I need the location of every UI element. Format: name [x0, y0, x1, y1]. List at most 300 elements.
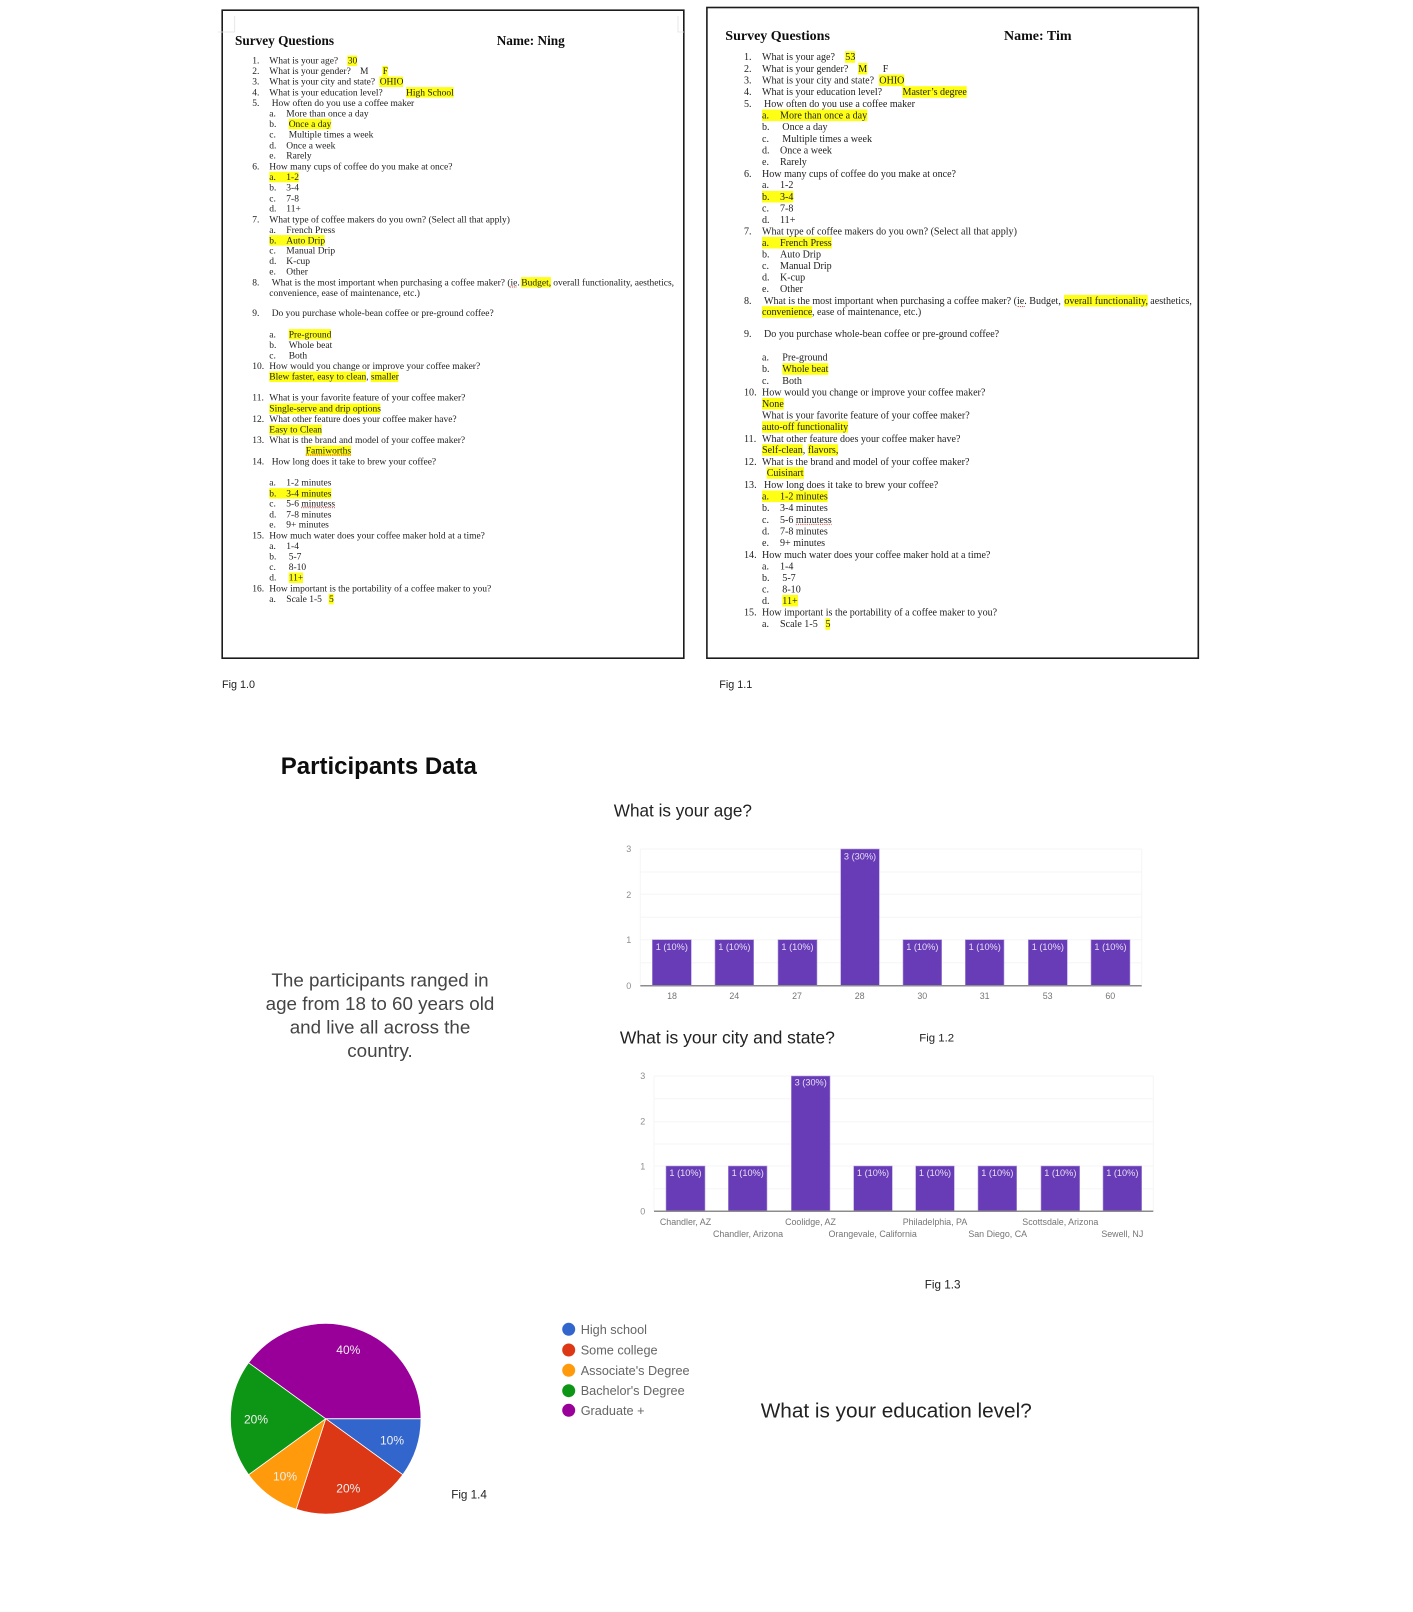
- survey questions and answers: b.: [762, 573, 770, 584]
- survey questions and answers: a.: [762, 238, 769, 249]
- survey questions and answers: 9.: [252, 309, 259, 319]
- survey questions and answers: How long does it take to brew your coffee?: [764, 480, 939, 491]
- survey questions and answers: 5-7: [782, 573, 796, 584]
- bars: [666, 1076, 1142, 1211]
- survey questions and answers: e.: [269, 268, 276, 278]
- survey questions and answers: 3-4 minutes: [286, 489, 332, 499]
- chart heading: city and state: What is your city and state?: [620, 1027, 835, 1047]
- survey questions and answers: What is your gender?: [762, 64, 849, 75]
- survey questions and answers: Multiple times a week: [782, 134, 873, 145]
- x axis labels: Chandler, AZ: [660, 1217, 712, 1227]
- survey questions and answers: Do you purchase whole-bean coffee or pre-ground coffee?: [272, 308, 494, 319]
- survey questions and answers: auto-off functionality: [762, 422, 848, 433]
- survey questions and answers: Both: [782, 376, 802, 387]
- slice: associate's degree: [249, 1419, 326, 1509]
- survey questions and answers: 13.: [744, 480, 757, 491]
- survey questions and answers: 7-8: [286, 194, 299, 204]
- caption: Fig 1.0: Fig 1.0: [222, 679, 255, 691]
- survey questions and answers: overall functionality, aesthetics,: [553, 277, 674, 288]
- respondent name: Name: Ning: [497, 33, 565, 48]
- survey questions and answers: c.: [762, 584, 769, 596]
- survey questions and answers: 2.: [252, 67, 259, 77]
- survey questions and answers: 9.: [744, 329, 752, 340]
- survey questions and answers: b.: [762, 122, 770, 133]
- chart heading: age: What is your age?: [614, 801, 752, 821]
- slice percentage labels: 10%: [380, 1433, 404, 1447]
- spell-check underlines: [796, 306, 1025, 524]
- survey questions and answers: c.: [762, 204, 769, 214]
- slice: bachelor's degree: [230, 1363, 326, 1475]
- survey questions and answers: 4.: [252, 88, 259, 98]
- survey questions and answers: Rarely: [286, 152, 312, 162]
- survey questions and answers: How long does it take to brew your coffee?: [272, 456, 436, 467]
- survey questions and answers: Rarely: [780, 157, 807, 168]
- x axis labels: 31: [980, 991, 990, 1001]
- x axis labels: 60: [1105, 991, 1115, 1001]
- survey questions and answers: d.: [762, 215, 770, 226]
- x axis labels: [667, 991, 1115, 1001]
- survey questions and answers: c.: [269, 247, 276, 257]
- x axis labels: Scottsdale, Arizona: [1022, 1217, 1098, 1227]
- survey questions and answers: French Press: [286, 226, 335, 236]
- survey title: Survey Questions: [235, 33, 334, 48]
- survey questions and answers: 4.: [744, 87, 752, 98]
- survey questions and answers: 10.: [252, 362, 264, 372]
- survey questions and answers: What is the brand and model of your coffee maker?: [762, 457, 970, 468]
- survey questions and answers: Blew faster, easy to clean,: [269, 372, 369, 383]
- slice percentage labels: [244, 1343, 404, 1495]
- bar value labels: 1 (10%): [969, 942, 1001, 952]
- survey questions and answers: F: [383, 67, 388, 77]
- survey questions and answers: Both: [289, 351, 307, 361]
- survey questions and answers: 5-6 minutess: [286, 500, 335, 510]
- survey questions and answers: a.: [269, 330, 276, 340]
- x axis labels: 27: [792, 991, 802, 1001]
- survey questions and answers: 5.: [744, 99, 752, 110]
- survey questions and answers: convenience, ease of maintenance, etc.): [269, 288, 420, 299]
- survey questions and answers: More than once a day: [286, 110, 369, 120]
- survey questions and answers: Auto Drip: [780, 250, 821, 260]
- y axis labels: 0: [640, 1207, 645, 1217]
- survey questions and answers: d.: [269, 510, 276, 520]
- bar value labels: 3 (30%): [844, 851, 876, 861]
- survey questions and answers: Easy to Clean: [269, 426, 322, 436]
- survey questions and answers: d.: [269, 257, 276, 267]
- survey questions and answers: Cuisinart: [767, 468, 804, 479]
- survey questions and answers: c.: [269, 131, 276, 141]
- survey questions and answers: What other feature does your coffee maker have?: [269, 414, 457, 425]
- survey questions and answers: c.: [762, 261, 769, 272]
- bar value labels: 1 (10%): [669, 1168, 702, 1178]
- bars: [652, 849, 1130, 986]
- survey questions and answers: Pre-ground: [289, 330, 332, 340]
- legend item: bachelor's degree: Bachelor's Degree: [581, 1384, 685, 1398]
- axis baseline: [640, 985, 1142, 987]
- survey questions and answers: 11+: [780, 215, 796, 226]
- slice: some college: [296, 1419, 403, 1514]
- survey questions and answers: e.: [269, 152, 276, 162]
- survey questions and answers: Scale 1-5: [780, 619, 818, 630]
- bar value labels: 1 (10%): [1044, 1168, 1076, 1178]
- y axis labels: 3: [640, 1071, 645, 1081]
- survey questions and answers: 11+: [286, 205, 301, 215]
- chart heading: education level: What is your education level?: [761, 1399, 1032, 1422]
- bar value labels: 1 (10%): [1094, 942, 1127, 952]
- panel: survey form Tim: [707, 8, 1198, 658]
- survey questions and answers: 1-2 minutes: [286, 478, 332, 488]
- survey questions and answers: K-cup: [780, 272, 805, 284]
- survey questions and answers: How would you change or improve your coffee maker?: [269, 361, 480, 372]
- bar chart: age: [626, 844, 1142, 1001]
- x axis labels: Philadelphia, PA: [903, 1217, 967, 1227]
- legend item: high school: High school: [581, 1323, 647, 1337]
- survey questions and answers: 1-2: [286, 173, 299, 183]
- survey questions and answers: What is the most important when purchasing a coffee maker? (ie. Budget,: [764, 296, 1061, 307]
- text block: participants summary: and live all across the: [290, 1016, 470, 1037]
- survey questions and answers: , ease of maintenance, etc.): [812, 307, 921, 318]
- survey questions and answers: Self-clean,: [762, 445, 805, 456]
- gridlines: [640, 849, 1142, 985]
- survey questions and answers: 7.: [744, 226, 752, 238]
- caption: Fig 1.3: Fig 1.3: [925, 1278, 961, 1291]
- survey questions and answers: c.: [269, 500, 276, 510]
- slice percentage labels: 20%: [244, 1412, 268, 1426]
- axis baseline: [654, 1210, 1153, 1212]
- survey questions and answers: 13.: [252, 436, 264, 446]
- survey questions and answers: 8-10: [782, 584, 801, 596]
- survey questions and answers: c.: [762, 376, 769, 387]
- slice percentage labels: 20%: [336, 1481, 361, 1495]
- survey questions and answers: 30: [348, 57, 357, 67]
- survey questions and answers: e.: [762, 284, 769, 295]
- text block: participants summary: The participants ranged in: [271, 970, 489, 991]
- survey questions and answers: Do you purchase whole-bean coffee or pre-ground coffee?: [764, 329, 1000, 340]
- survey questions and answers: K-cup: [286, 257, 310, 267]
- survey questions and answers: M: [360, 67, 369, 77]
- caption: Fig 1.1: Fig 1.1: [719, 679, 752, 691]
- survey questions and answers: French Press: [780, 238, 832, 249]
- survey questions and answers: How much water does your coffee maker hold at a time?: [762, 550, 991, 561]
- survey questions and answers: 5-7: [289, 552, 302, 562]
- survey questions and answers: 11.: [744, 434, 756, 445]
- x axis labels: Chandler, Arizona: [713, 1229, 783, 1239]
- survey questions and answers: 2.: [744, 64, 752, 75]
- survey questions and answers: 7-8 minutes: [780, 526, 828, 538]
- x axis labels: 24: [729, 991, 739, 1001]
- panel: survey form Ning: [218, 10, 684, 658]
- survey questions and answers: 1-2: [780, 180, 793, 191]
- caption: Fig 1.4: Fig 1.4: [451, 1488, 487, 1501]
- survey questions and answers: Famiworths: [306, 447, 351, 457]
- survey questions and answers: convenience: [762, 307, 813, 318]
- gridlines: [654, 1076, 1153, 1211]
- survey questions and answers: b.: [269, 489, 276, 499]
- survey questions and answers: d.: [269, 205, 276, 215]
- survey questions and answers: What is your city and state?: [269, 78, 375, 88]
- y axis labels: [626, 844, 631, 991]
- survey questions and answers: d.: [269, 574, 276, 584]
- survey questions and answers: F: [883, 64, 889, 75]
- survey questions and answers: d.: [762, 146, 770, 156]
- survey questions and answers: b.: [269, 552, 276, 562]
- survey questions and answers: 16.: [252, 584, 264, 594]
- survey questions and answers: aesthetics,: [1150, 296, 1192, 307]
- survey questions and answers: 5: [329, 595, 334, 605]
- heading: Participants Data: Participants Data: [281, 753, 478, 780]
- survey questions and answers: Once a week: [780, 146, 833, 156]
- bar value labels: 1 (10%): [1032, 942, 1064, 952]
- survey questions and answers: 11+: [782, 596, 798, 607]
- survey questions and answers: 7-8 minutes: [286, 510, 332, 520]
- page corner marks: [218, 16, 684, 32]
- survey questions and answers: How many cups of coffee do you make at once?: [269, 162, 452, 173]
- survey questions and answers: 8-10: [289, 563, 306, 573]
- survey questions and answers: 12.: [744, 457, 757, 468]
- survey questions and answers: 53: [845, 52, 855, 63]
- survey questions and answers: a.: [762, 110, 769, 122]
- survey questions and answers: 3-4: [286, 184, 299, 194]
- survey questions and answers: Budget,: [521, 278, 551, 288]
- survey questions and answers: What is your favorite feature of your coffee maker?: [269, 393, 465, 404]
- y axis labels: 1: [640, 1162, 645, 1172]
- x axis labels: Coolidge, AZ: [785, 1217, 836, 1227]
- survey questions and answers: Pre-ground: [782, 352, 828, 364]
- x axis labels: 30: [917, 991, 927, 1001]
- y axis labels: 0: [626, 981, 631, 991]
- survey questions and answers: a.: [269, 542, 276, 552]
- x axis labels: 28: [855, 991, 865, 1001]
- survey questions and answers: OHIO: [380, 78, 404, 88]
- panel frame: [222, 10, 684, 658]
- bar value labels: 1 (10%): [718, 942, 750, 952]
- survey questions and answers: OHIO: [879, 76, 904, 86]
- survey questions and answers: What is your favorite feature of your coffee maker?: [762, 410, 970, 422]
- survey questions and answers: 14.: [744, 550, 757, 561]
- survey questions and answers: How important is the portability of a coffee maker to you?: [269, 583, 491, 594]
- survey questions and answers: d.: [269, 141, 276, 151]
- survey questions and answers: Once a day: [289, 120, 332, 130]
- survey questions and answers: How important is the portability of a coffee maker to you?: [762, 608, 998, 618]
- survey questions and answers: a.: [762, 619, 769, 630]
- y axis labels: 3: [626, 844, 631, 854]
- x axis labels: 53: [1043, 991, 1053, 1001]
- answer highlights: [762, 51, 1148, 630]
- survey questions and answers: 3.: [252, 78, 259, 88]
- survey questions and answers: 15.: [744, 608, 757, 618]
- survey questions and answers: [744, 52, 1192, 630]
- pie chart: education level: [230, 1323, 421, 1514]
- survey questions and answers: 9+ minutes: [780, 538, 825, 549]
- survey questions and answers: What is your age?: [269, 57, 338, 67]
- survey questions and answers: e.: [762, 157, 769, 168]
- y axis labels: 1: [626, 935, 631, 945]
- survey questions and answers: b.: [269, 120, 276, 130]
- legend item: graduate +: Graduate +: [581, 1404, 645, 1418]
- answer highlights: [269, 56, 551, 604]
- survey questions and answers: What is your city and state?: [762, 76, 875, 86]
- survey questions and answers: 10.: [744, 388, 757, 398]
- survey questions and answers: Other: [780, 284, 804, 295]
- bar chart: city and state: [640, 1071, 1153, 1239]
- survey questions and answers: c.: [269, 563, 276, 573]
- survey questions and answers: 1.: [252, 57, 259, 67]
- survey questions and answers: What type of coffee makers do you own? (Select all that apply): [762, 226, 1017, 238]
- survey questions and answers: a.: [269, 478, 276, 488]
- survey questions and answers: 6.: [252, 163, 259, 173]
- survey questions and answers: Once a week: [286, 141, 336, 151]
- survey questions and answers: How much water does your coffee maker hold at a time?: [269, 530, 485, 541]
- survey questions and answers: 3.: [744, 76, 752, 86]
- slice percentage labels: 10%: [273, 1469, 297, 1483]
- survey questions and answers: b.: [269, 341, 276, 351]
- x axis labels: San Diego, CA: [968, 1229, 1027, 1239]
- survey questions and answers: How often do you use a coffee maker: [764, 99, 916, 110]
- survey questions and answers: 5: [826, 619, 831, 630]
- survey questions and answers: [252, 57, 674, 605]
- survey questions and answers: a.: [269, 173, 276, 183]
- text block: participants summary: [266, 970, 494, 1061]
- survey questions and answers: Scale 1-5: [286, 595, 322, 605]
- spell-check underlines: [301, 287, 517, 508]
- slice: graduate +: [249, 1323, 421, 1419]
- survey questions and answers: Manual Drip: [286, 247, 335, 257]
- bar value labels: 1 (10%): [919, 1168, 951, 1178]
- survey questions and answers: Other: [286, 268, 309, 278]
- survey questions and answers: c.: [269, 351, 276, 361]
- bar value labels: 1 (10%): [906, 942, 938, 952]
- survey questions and answers: a.: [762, 492, 769, 502]
- survey questions and answers: What type of coffee makers do you own? (Select all that apply): [269, 214, 510, 225]
- survey questions and answers: a.: [762, 352, 769, 364]
- survey questions and answers: b.: [762, 503, 770, 514]
- survey questions and answers: 8.: [252, 278, 259, 288]
- survey questions and answers: High School: [406, 88, 454, 98]
- survey questions and answers: a.: [762, 562, 769, 572]
- slice percentage labels: 40%: [336, 1343, 361, 1357]
- survey questions and answers: 11+: [289, 574, 303, 584]
- survey questions and answers: a.: [269, 226, 276, 236]
- survey questions and answers: 3-4 minutes: [780, 503, 828, 514]
- survey questions and answers: c.: [762, 134, 769, 145]
- survey questions and answers: c.: [269, 194, 276, 204]
- survey questions and answers: Once a day: [782, 122, 828, 133]
- survey questions and answers: b.: [762, 364, 770, 375]
- legend item: associate's degree: Associate's Degree: [581, 1364, 690, 1378]
- survey questions and answers: 7.: [252, 215, 259, 225]
- x axis labels: Sewell, NJ: [1101, 1229, 1143, 1239]
- survey questions and answers: 1-4: [286, 542, 299, 552]
- text block: participants summary: age from 18 to 60 years old: [266, 993, 494, 1014]
- survey questions and answers: How often do you use a coffee maker: [272, 98, 415, 109]
- survey questions and answers: 8.: [744, 296, 752, 307]
- survey questions and answers: Auto Drip: [286, 236, 325, 246]
- survey questions and answers: b.: [269, 236, 276, 246]
- survey questions and answers: What other feature does your coffee maker have?: [762, 434, 961, 445]
- survey questions and answers: What is your gender?: [269, 67, 351, 77]
- survey questions and answers: Master’s degree: [902, 87, 967, 98]
- survey questions and answers: How would you change or improve your coffee maker?: [762, 388, 986, 398]
- survey questions and answers: d.: [762, 596, 770, 607]
- survey questions and answers: overall functionality,: [1064, 296, 1148, 307]
- survey questions and answers: What is the most important when purchasing a coffee maker? (ie.: [272, 277, 520, 288]
- survey questions and answers: Single-serve and drip options: [269, 405, 381, 415]
- survey questions and answers: What is the brand and model of your coffee maker?: [269, 435, 465, 446]
- caption: Fig 1.2: Fig 1.2: [919, 1032, 954, 1044]
- survey questions and answers: Whole beat: [782, 364, 829, 375]
- survey questions and answers: a.: [269, 110, 276, 120]
- survey questions and answers: More than once a day: [780, 110, 867, 122]
- survey questions and answers: 5-6 minutess: [780, 515, 832, 526]
- survey questions and answers: b.: [762, 250, 770, 260]
- survey questions and answers: 1-4: [780, 562, 793, 572]
- y axis labels: [640, 1071, 645, 1217]
- survey questions and answers: 11.: [252, 394, 264, 404]
- survey questions and answers: 1-2 minutes: [780, 492, 828, 502]
- survey questions and answers: Manual Drip: [780, 261, 832, 272]
- legend: education level: [562, 1323, 690, 1418]
- survey questions and answers: e.: [762, 538, 769, 549]
- x axis labels: Orangevale, California: [829, 1229, 917, 1239]
- y axis labels: 2: [640, 1117, 645, 1127]
- respondent name: Name: Tim: [1004, 29, 1072, 44]
- text block: participants summary: country.: [347, 1040, 413, 1061]
- survey questions and answers: a.: [762, 180, 769, 191]
- survey questions and answers: 1.: [744, 52, 752, 63]
- survey questions and answers: 6.: [744, 169, 752, 180]
- x axis labels: [660, 1217, 1143, 1239]
- bar value labels: 1 (10%): [857, 1168, 889, 1178]
- slice: high school: [326, 1419, 421, 1475]
- survey questions and answers: 5.: [252, 99, 259, 109]
- survey questions and answers: 3-4: [780, 192, 793, 203]
- bar value labels: 1 (10%): [732, 1168, 764, 1178]
- bar value labels: 1 (10%): [781, 942, 814, 952]
- survey questions and answers: What is your education level?: [269, 88, 383, 98]
- survey questions and answers: 15.: [252, 531, 264, 541]
- survey questions and answers: c.: [762, 515, 769, 526]
- survey questions and answers: e.: [269, 521, 276, 531]
- x axis labels: 18: [667, 991, 677, 1001]
- bar value labels: 1 (10%): [1106, 1168, 1138, 1178]
- survey questions and answers: smaller: [371, 373, 400, 383]
- survey questions and answers: 9+ minutes: [286, 521, 329, 531]
- survey title: Survey Questions: [725, 29, 830, 44]
- survey questions and answers: b.: [762, 192, 770, 203]
- survey questions and answers: M: [858, 64, 867, 75]
- bar value labels: 1 (10%): [981, 1168, 1013, 1178]
- survey questions and answers: d.: [762, 526, 770, 538]
- survey questions and answers: a.: [269, 595, 276, 605]
- y axis labels: 2: [626, 890, 631, 900]
- survey questions and answers: 7-8: [780, 204, 793, 214]
- survey questions and answers: Multiple times a week: [289, 131, 374, 141]
- survey questions and answers: 14.: [252, 457, 264, 467]
- survey questions and answers: Whole beat: [289, 341, 333, 351]
- bar value labels: 1 (10%): [656, 942, 688, 952]
- legend item: some college: Some college: [581, 1344, 658, 1358]
- survey questions and answers: d.: [762, 272, 770, 284]
- survey questions and answers: flavors,: [808, 445, 838, 456]
- bar value labels: 3 (30%): [795, 1078, 827, 1088]
- panel frame: [707, 8, 1198, 658]
- survey questions and answers: None: [762, 399, 784, 410]
- survey questions and answers: What is your education level?: [762, 87, 883, 98]
- survey questions and answers: 12.: [252, 415, 264, 425]
- survey questions and answers: What is your age?: [762, 52, 835, 63]
- bar value labels: [656, 851, 1127, 952]
- bar value labels: [669, 1078, 1138, 1178]
- survey questions and answers: b.: [269, 184, 276, 194]
